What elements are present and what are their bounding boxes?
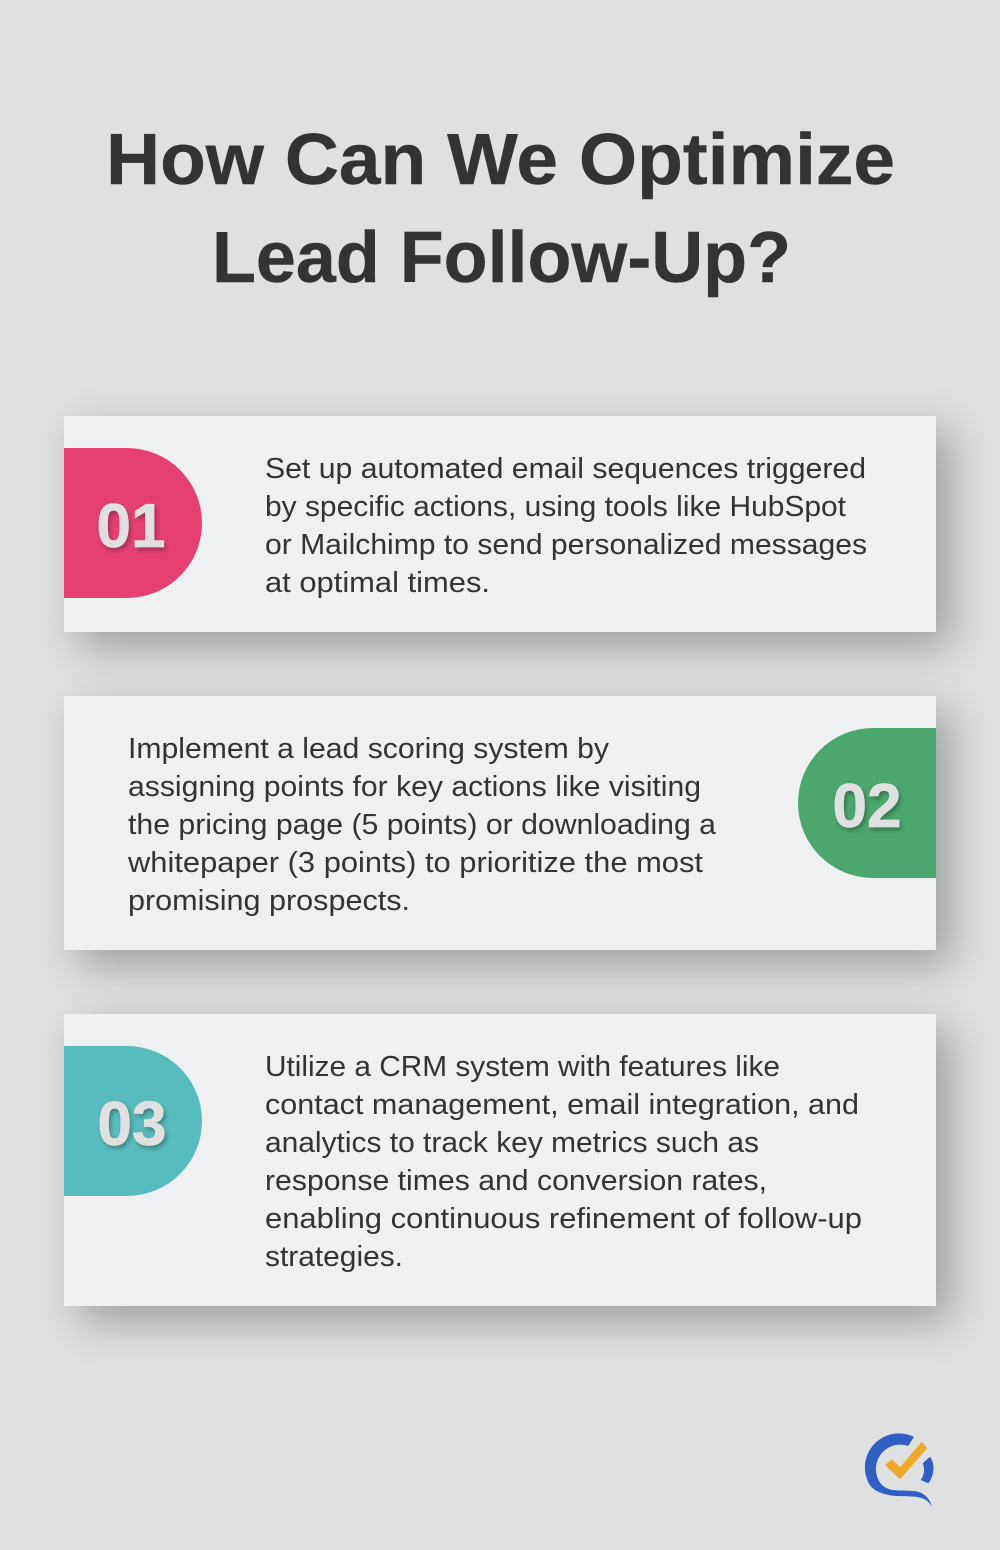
- badge: 03: [64, 1046, 202, 1196]
- text: step 02 description: [127, 733, 716, 917]
- text: step 03 description: [265, 1051, 862, 1273]
- icon: logo: [864, 1433, 934, 1506]
- text: step 02 description: whitepaper (3 points) to prioritize the most: [127, 847, 703, 879]
- title: [106, 120, 895, 298]
- text: step 01 description: Set up automated email sequences triggered: [265, 453, 866, 485]
- text: step 02 description: promising prospects.: [128, 885, 410, 917]
- text: step 03 description: response times and conversion rates,: [265, 1165, 767, 1197]
- badge: 02: 02: [833, 772, 901, 841]
- text: step 03 description: Utilize a CRM system with features like: [265, 1051, 780, 1083]
- text: step 02 description: Implement a lead scoring system by: [128, 733, 610, 765]
- panel: step 02: [64, 696, 936, 950]
- badge: 01: 01: [97, 492, 165, 561]
- text: step 01 description: by specific actions, using tools like HubSpot: [265, 491, 846, 523]
- text: step 01 description: at optimal times.: [265, 567, 490, 599]
- text: step 02 description: assigning points for key actions like visiting: [128, 771, 701, 803]
- badge: 02: [798, 728, 936, 878]
- title: Lead Follow-Up?: [212, 218, 791, 298]
- text: step 01 description: or Mailchimp to send personalized messages: [265, 529, 867, 561]
- panel: step 01: [64, 416, 936, 632]
- panel: step 03: [64, 1014, 936, 1306]
- text: step 01 description: [265, 453, 867, 599]
- text: step 03 description: contact management, email integration, and: [265, 1089, 859, 1121]
- text: step 02 description: the pricing page (5 points) or downloading a: [128, 809, 716, 841]
- text: step 03 description: analytics to track key metrics such as: [265, 1127, 759, 1159]
- text: step 03 description: enabling continuous refinement of follow-up: [265, 1203, 862, 1235]
- badge: 01: [64, 448, 202, 598]
- title: How Can We Optimize: [106, 120, 895, 200]
- text: step 03 description: strategies.: [265, 1241, 403, 1273]
- badge: 03: 03: [98, 1090, 166, 1159]
